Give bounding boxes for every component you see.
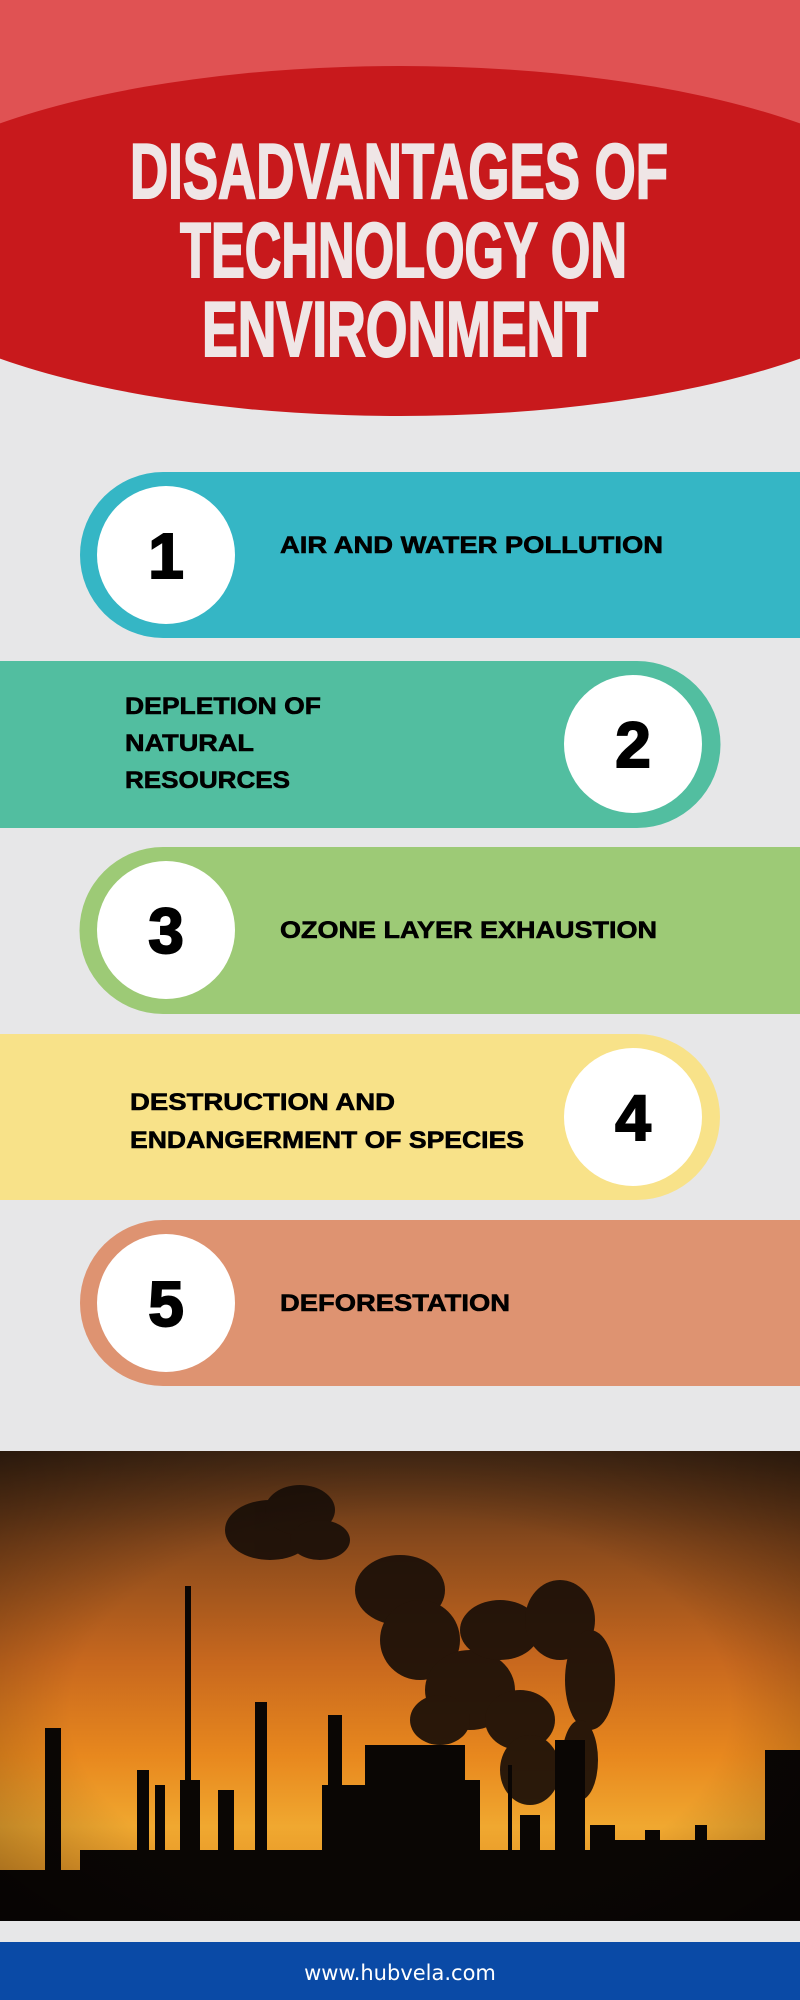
item 1	[80, 472, 800, 638]
title: ENVIRONMENT	[202, 285, 598, 373]
item 4: ENDANGERMENT OF SPECIES	[130, 1127, 524, 1154]
number circle 2	[564, 675, 702, 813]
item 3	[80, 847, 800, 1014]
header band	[0, 0, 800, 416]
item 4	[0, 1034, 720, 1200]
number circle 5	[97, 1234, 235, 1372]
number circle 1	[97, 486, 235, 624]
number circle 1: 1	[148, 520, 184, 592]
item 2: DEPLETION OF	[125, 693, 321, 720]
footer	[0, 1942, 800, 2000]
item 3: OZONE LAYER EXHAUSTION	[280, 917, 657, 944]
number circle 4	[564, 1048, 702, 1186]
item 2	[0, 661, 720, 828]
number circle 3	[97, 861, 235, 999]
number circle 4: 4	[615, 1082, 651, 1154]
footer: www.hubvela.com	[304, 1961, 496, 1985]
number circle 2: 2	[615, 709, 651, 781]
title	[130, 127, 668, 373]
item 5: DEFORESTATION	[280, 1290, 510, 1317]
item 2: RESOURCES	[125, 767, 290, 794]
item 4: DESTRUCTION AND	[130, 1089, 395, 1116]
item 1: AIR AND WATER POLLUTION	[280, 532, 663, 559]
number circle 5: 5	[148, 1268, 184, 1340]
photo: factory smoke at sunset	[0, 1451, 800, 1921]
item 5	[80, 1220, 800, 1386]
item 2: NATURAL	[125, 730, 254, 757]
number circle 3: 3	[148, 895, 184, 967]
